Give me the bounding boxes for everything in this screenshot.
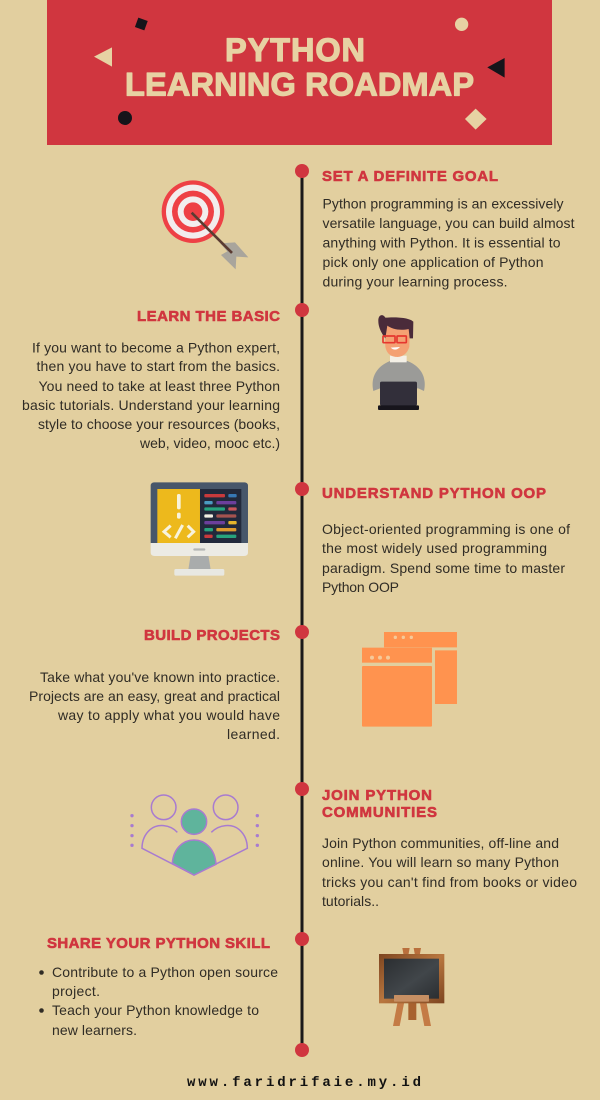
title: LEARNING ROADMAP [125,66,474,102]
body text: Python OOP [322,579,399,595]
body text: basic tutorials. Understand your learning [22,397,280,413]
step 2: learn the basic [22,308,280,451]
icon: browser windows [362,632,457,727]
icon: code monitor [151,482,248,576]
body text [322,835,577,909]
body text: versatile language, you can build almost [322,215,575,231]
body text [29,669,280,742]
body text: online. You will learn so many Python [322,854,559,870]
heading: JOIN PYTHON [322,787,432,804]
title: PYTHON [225,32,365,68]
step 6: share your python skill [39,935,278,1038]
body text: paradigm. Spend some time to master [322,560,565,576]
step 1: set a definite goal [322,168,575,290]
body text: style to choose your resources (books, [38,416,280,432]
icon: target with arrow [162,180,248,269]
body text [322,521,570,595]
heading: UNDERSTAND PYTHON OOP [322,485,546,502]
heading: BUILD PROJECTS [144,627,280,644]
icon: developer with laptop [373,315,425,410]
bullet list: project. [52,983,100,999]
body text: Object-oriented programming is one of [322,521,570,537]
body text: If you want to become a Python expert, [32,340,280,356]
step 3: understand python oop [322,485,570,595]
body text: web, video, mooc etc.) [139,435,280,451]
body text: You need to take at least three Python [38,378,280,394]
body text: tricks you can't find from books or video [322,874,577,890]
step 4: build projects [29,627,280,742]
body text: learned. [227,726,280,742]
timeline [295,164,309,1057]
body text: Projects are an easy, great and practical [29,688,280,704]
bullet list: Contribute to a Python open source [52,964,278,980]
heading [322,787,437,821]
heading: SHARE YOUR PYTHON SKILL [47,935,270,952]
heading: COMMUNITIES [322,804,437,821]
body text: during your learning process. [322,274,508,290]
body text [322,196,575,290]
body text: Python programming is an excessively [322,196,564,212]
footer url: www.faridrifaie.my.id [187,1075,421,1091]
icon: chalkboard on easel [379,948,444,1026]
body text: tutorials.. [322,893,379,909]
body text: the most widely used programming [322,540,547,556]
body text [22,340,280,451]
title [125,32,474,102]
body text: way to apply what you would have [57,707,280,723]
body text: Take what you've known into practice. [40,669,280,685]
header decorative shapes [94,18,505,130]
bullet list: new learners. [52,1022,137,1038]
body text: anything with Python. It is essential to [322,234,561,250]
bullet list [39,964,278,1038]
icon: community group [130,795,259,875]
body text: then you have to start from the basics. [36,358,280,374]
heading: SET A DEFINITE GOAL [322,168,498,185]
heading: LEARN THE BASIC [137,308,280,325]
header banner [47,0,552,145]
body text: Join Python communities, off-line and [322,835,559,851]
step 5: join python communities [322,787,577,909]
body text: pick only one application of Python [322,254,544,270]
bullet list: Teach your Python knowledge to [52,1002,259,1018]
